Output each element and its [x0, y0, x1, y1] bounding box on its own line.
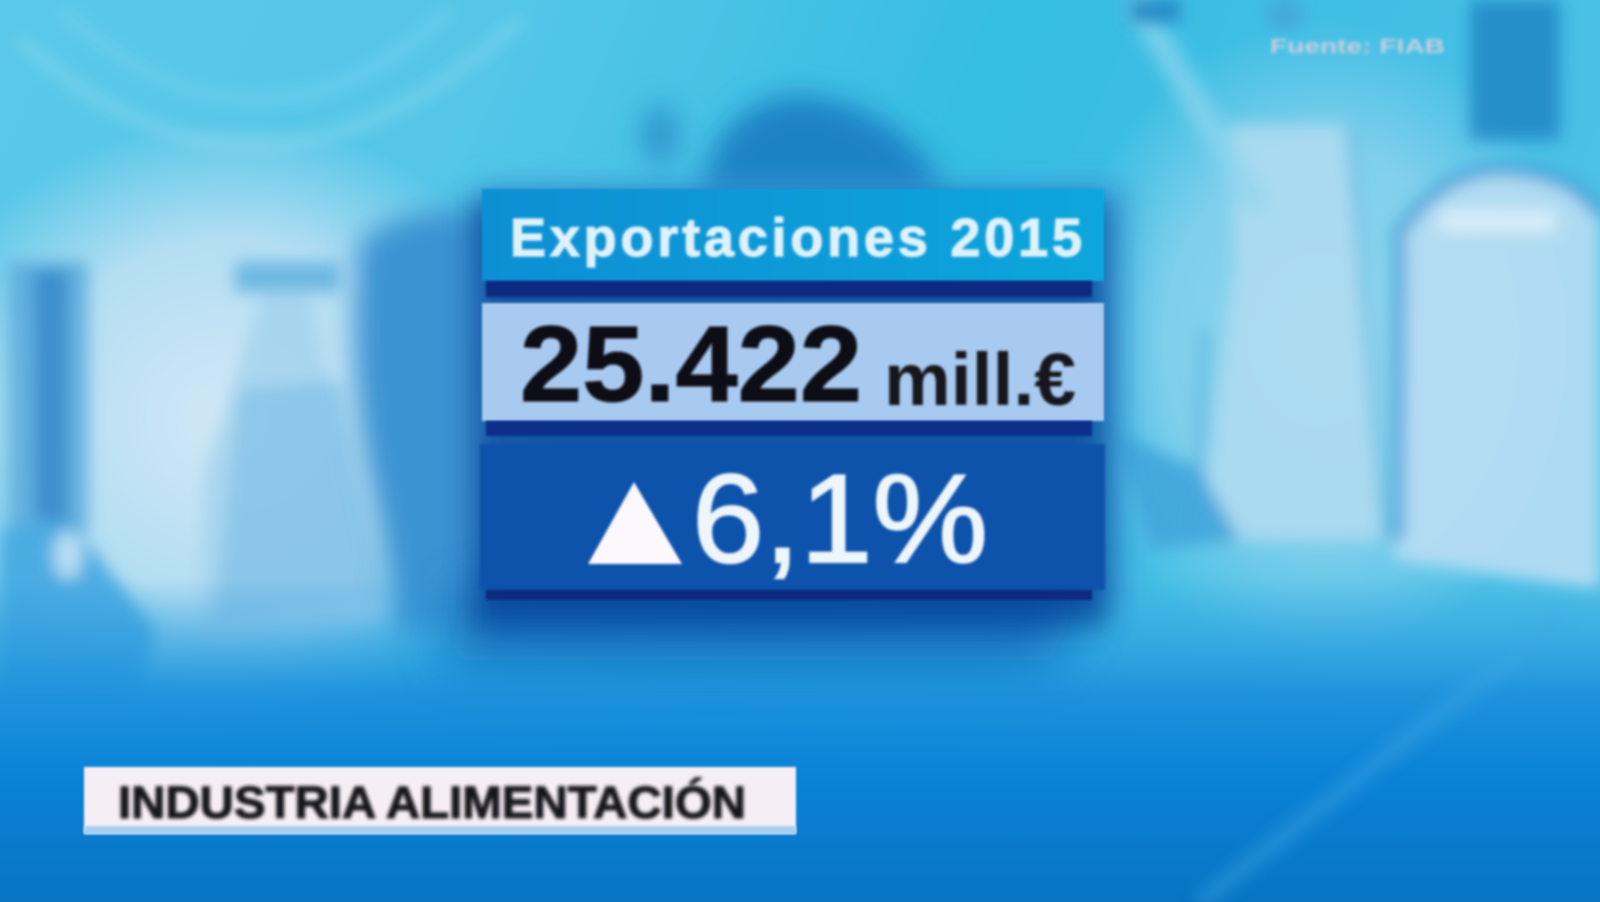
right glassware: [1110, 0, 1385, 550]
center-left flask: [200, 262, 395, 640]
growth text: 6,1%: [692, 448, 988, 589]
value text: 25.422: [520, 303, 862, 424]
data card: [472, 189, 1108, 625]
icon: up triangle: [588, 482, 682, 564]
panel: export value: [482, 303, 1104, 436]
caption label: [84, 767, 796, 834]
right bottle: [1130, 0, 1600, 590]
left flask: [0, 262, 155, 690]
watermark source text: Fuente: FIAB: [1270, 36, 1445, 58]
technician figure: [355, 95, 1130, 640]
caption text: INDUSTRIA ALIMENTACIÓN: [118, 777, 746, 828]
panel: heading bar: [482, 189, 1104, 297]
unit text: mill.€: [884, 338, 1076, 421]
panel: growth: [480, 444, 1105, 600]
heading text: Exportaciones 2015: [510, 208, 1082, 268]
card shadow: [472, 200, 1108, 625]
